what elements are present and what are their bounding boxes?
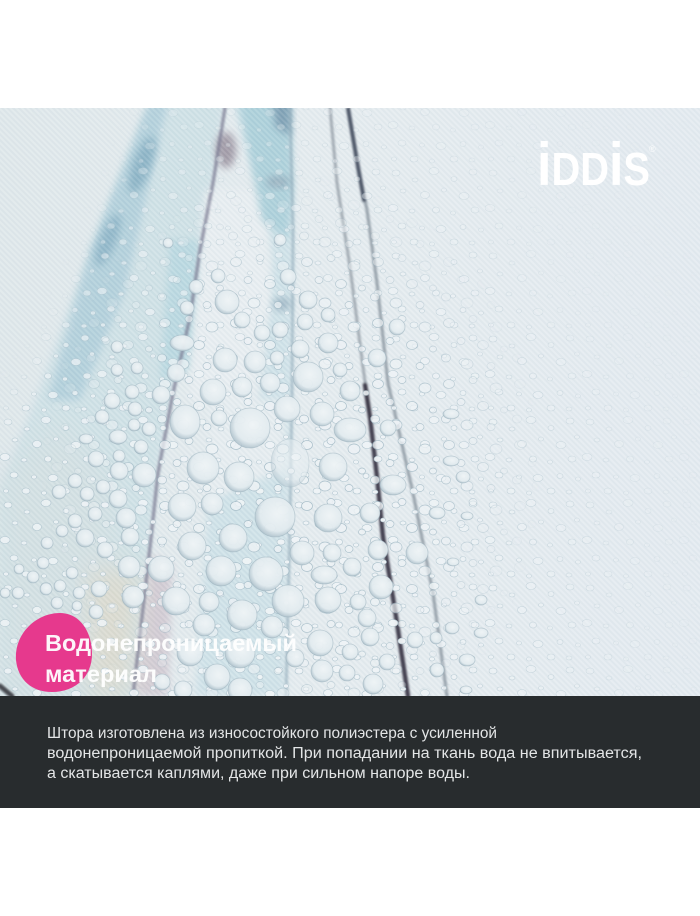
heading: waterproof material bbox=[45, 630, 297, 687]
small droplets bbox=[0, 108, 700, 696]
fabric background bbox=[0, 108, 700, 696]
medium droplets in the centre bbox=[56, 194, 528, 696]
registered mark: ® bbox=[649, 144, 656, 154]
heading line 1: Водонепроницаемый bbox=[45, 630, 297, 656]
pink blob behind heading bbox=[16, 613, 92, 692]
large droplets bbox=[0, 234, 488, 702]
panel background bbox=[0, 696, 700, 808]
dark streaks bbox=[0, 108, 447, 696]
brand logo: IDDIS bbox=[537, 131, 656, 198]
fabric weave bbox=[54, 108, 290, 398]
photo: water droplets on curtain fabric bbox=[0, 100, 700, 702]
watercolour stripes bbox=[0, 100, 294, 696]
description text: а скатывается каплями, даже при сильном напоре воды. bbox=[47, 765, 470, 782]
heading line 2: материал bbox=[45, 661, 157, 687]
dark description panel bbox=[0, 696, 700, 808]
description text: водонепроницаемой пропиткой. При попадании на ткань вода не впитывается, bbox=[47, 745, 642, 762]
description text bbox=[47, 725, 642, 782]
logo wordmark: iDDiS bbox=[537, 131, 650, 198]
description text: Штора изготовлена из износостойкого полиэстера с усиленной bbox=[47, 725, 497, 742]
